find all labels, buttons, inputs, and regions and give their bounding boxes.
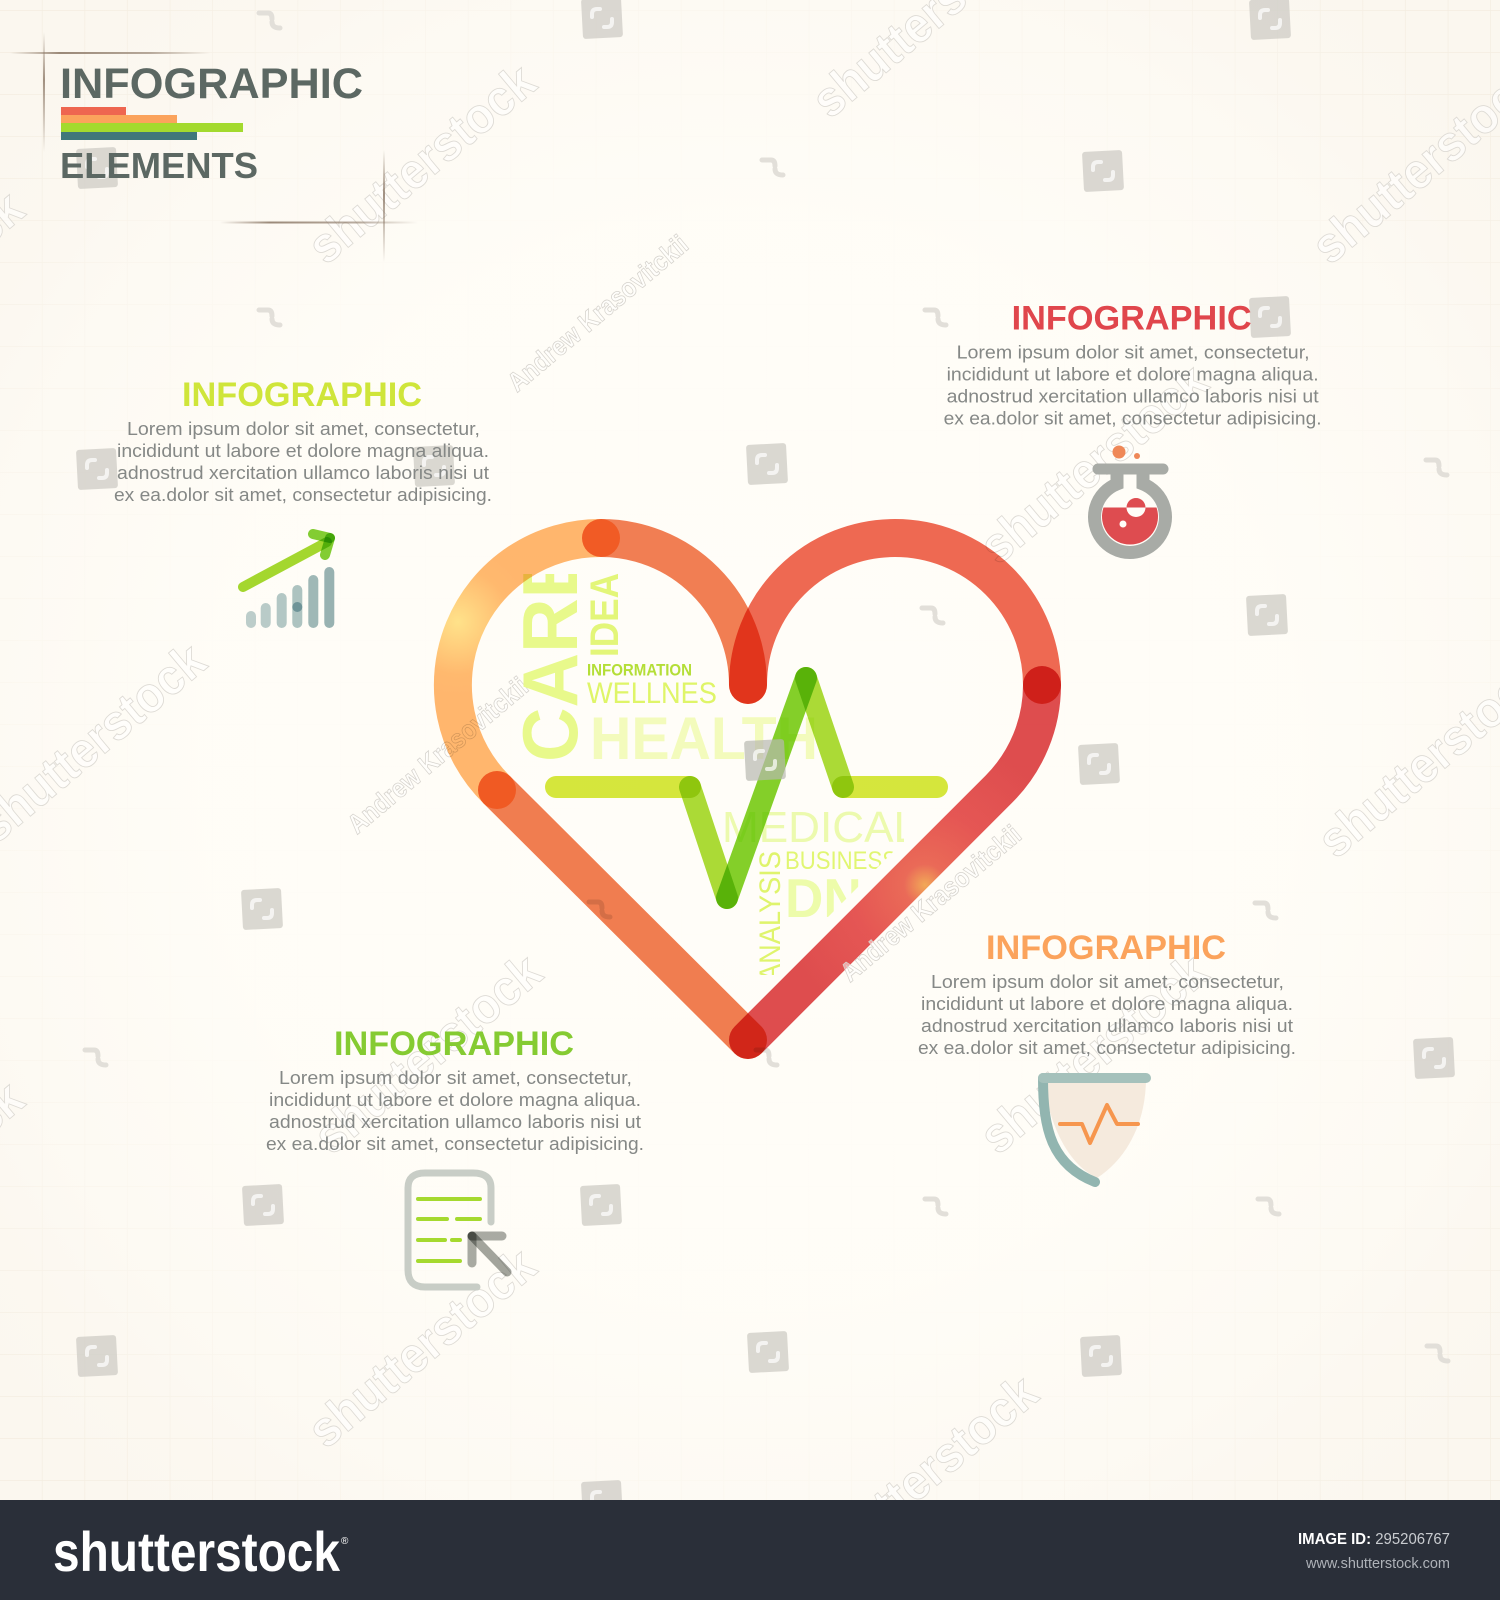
body text: adnostrud xercitation ullamco laboris nisi ut xyxy=(947,386,1319,406)
word: BUSINESS: BUSINESS xyxy=(785,847,897,875)
watermark over heart: Andrew Krasovitckii xyxy=(835,819,1027,988)
heart outline xyxy=(453,538,1042,1040)
body text: ex ea.dolor sit amet, consectetur adipisicing. xyxy=(114,485,492,505)
body text xyxy=(944,342,1322,428)
footer bar xyxy=(0,1500,1500,1600)
panel: red text block xyxy=(944,300,1322,428)
watermark square over pulse xyxy=(744,739,786,781)
heading: INFOGRAPHIC xyxy=(182,376,422,414)
title: elements: ELEMENTS xyxy=(60,145,258,186)
icon: document with cursor xyxy=(408,1173,507,1287)
word: HEALTH: HEALTH xyxy=(590,705,818,772)
body text: ex ea.dolor sit amet, consectetur adipisicing. xyxy=(918,1038,1296,1058)
body text: Lorem ipsum dolor sit amet, consectetur, xyxy=(957,342,1310,362)
panel: lime text block xyxy=(114,376,492,505)
title: infographic: INFOGRAPHIC xyxy=(60,60,363,108)
body text: Lorem ipsum dolor sit amet, consectetur, xyxy=(279,1068,632,1088)
body text: Lorem ipsum dolor sit amet, consectetur, xyxy=(127,419,480,439)
word: DNA: DNA xyxy=(785,867,900,929)
body text: adnostrud xercitation ullamco laboris nisi ut xyxy=(117,463,489,483)
word: ANALYSIS: ANALYSIS xyxy=(754,851,787,982)
website: www.shutterstock.com xyxy=(1305,1555,1450,1572)
body text: incididunt ut labore et dolore magna aliqua. xyxy=(921,994,1293,1014)
panel: orange text block xyxy=(918,929,1296,1058)
watermark layer: shutterstock xyxy=(303,943,552,1164)
heartbeat pulse line xyxy=(556,678,937,898)
icon: flask xyxy=(1094,446,1166,553)
title block xyxy=(10,32,418,262)
panel: green text block xyxy=(266,1025,644,1154)
word: INFORMATION: INFORMATION xyxy=(587,662,692,680)
word: IDEA: IDEA xyxy=(583,573,627,657)
watermark layer: Andrew Krasovitckii xyxy=(502,229,694,398)
watermark layer: shutterstock xyxy=(799,1364,1048,1585)
word: WELLNESS: WELLNESS xyxy=(587,677,735,710)
title color bars xyxy=(61,107,243,140)
heading: INFOGRAPHIC xyxy=(986,929,1226,967)
body text: adnostrud xercitation ullamco laboris nisi ut xyxy=(921,1016,1293,1036)
body text: ex ea.dolor sit amet, consectetur adipisicing. xyxy=(944,408,1322,428)
word cloud inside heart xyxy=(522,574,904,975)
body text xyxy=(266,1068,644,1154)
watermark layer: shutterstock xyxy=(969,943,1218,1164)
watermark layer: shutterstock xyxy=(297,1237,546,1458)
body text xyxy=(918,972,1296,1058)
watermark layer: Andrew Krasovitckii xyxy=(342,671,534,840)
heading: INFOGRAPHIC xyxy=(1012,300,1252,338)
body text: adnostrud xercitation ullamco laboris nisi ut xyxy=(269,1112,641,1132)
watermark layer: shutterstock xyxy=(297,53,546,274)
watermark layer: shutterstock xyxy=(969,353,1218,574)
icon: shield with pulse xyxy=(1043,1078,1146,1182)
body text: incididunt ut labore et dolore magna aliqua. xyxy=(269,1090,641,1110)
icon: growth chart xyxy=(243,534,330,623)
word: MEDICAL: MEDICAL xyxy=(722,803,918,852)
word: CARE: CARE xyxy=(506,548,594,762)
footer logo: shutterstock xyxy=(53,1520,341,1583)
body text: incididunt ut labore et dolore magna aliqua. xyxy=(947,364,1319,384)
registered mark: ® xyxy=(341,1536,349,1547)
body text: ex ea.dolor sit amet, consectetur adipisicing. xyxy=(266,1134,644,1154)
heading: INFOGRAPHIC xyxy=(334,1025,574,1063)
crosshair marks xyxy=(10,32,418,262)
body text: incididunt ut labore et dolore magna aliqua. xyxy=(117,441,489,461)
image id: IMAGE ID: 295206767 xyxy=(1298,1531,1450,1548)
body text: Lorem ipsum dolor sit amet, consectetur, xyxy=(931,972,1284,992)
body text xyxy=(114,419,492,505)
